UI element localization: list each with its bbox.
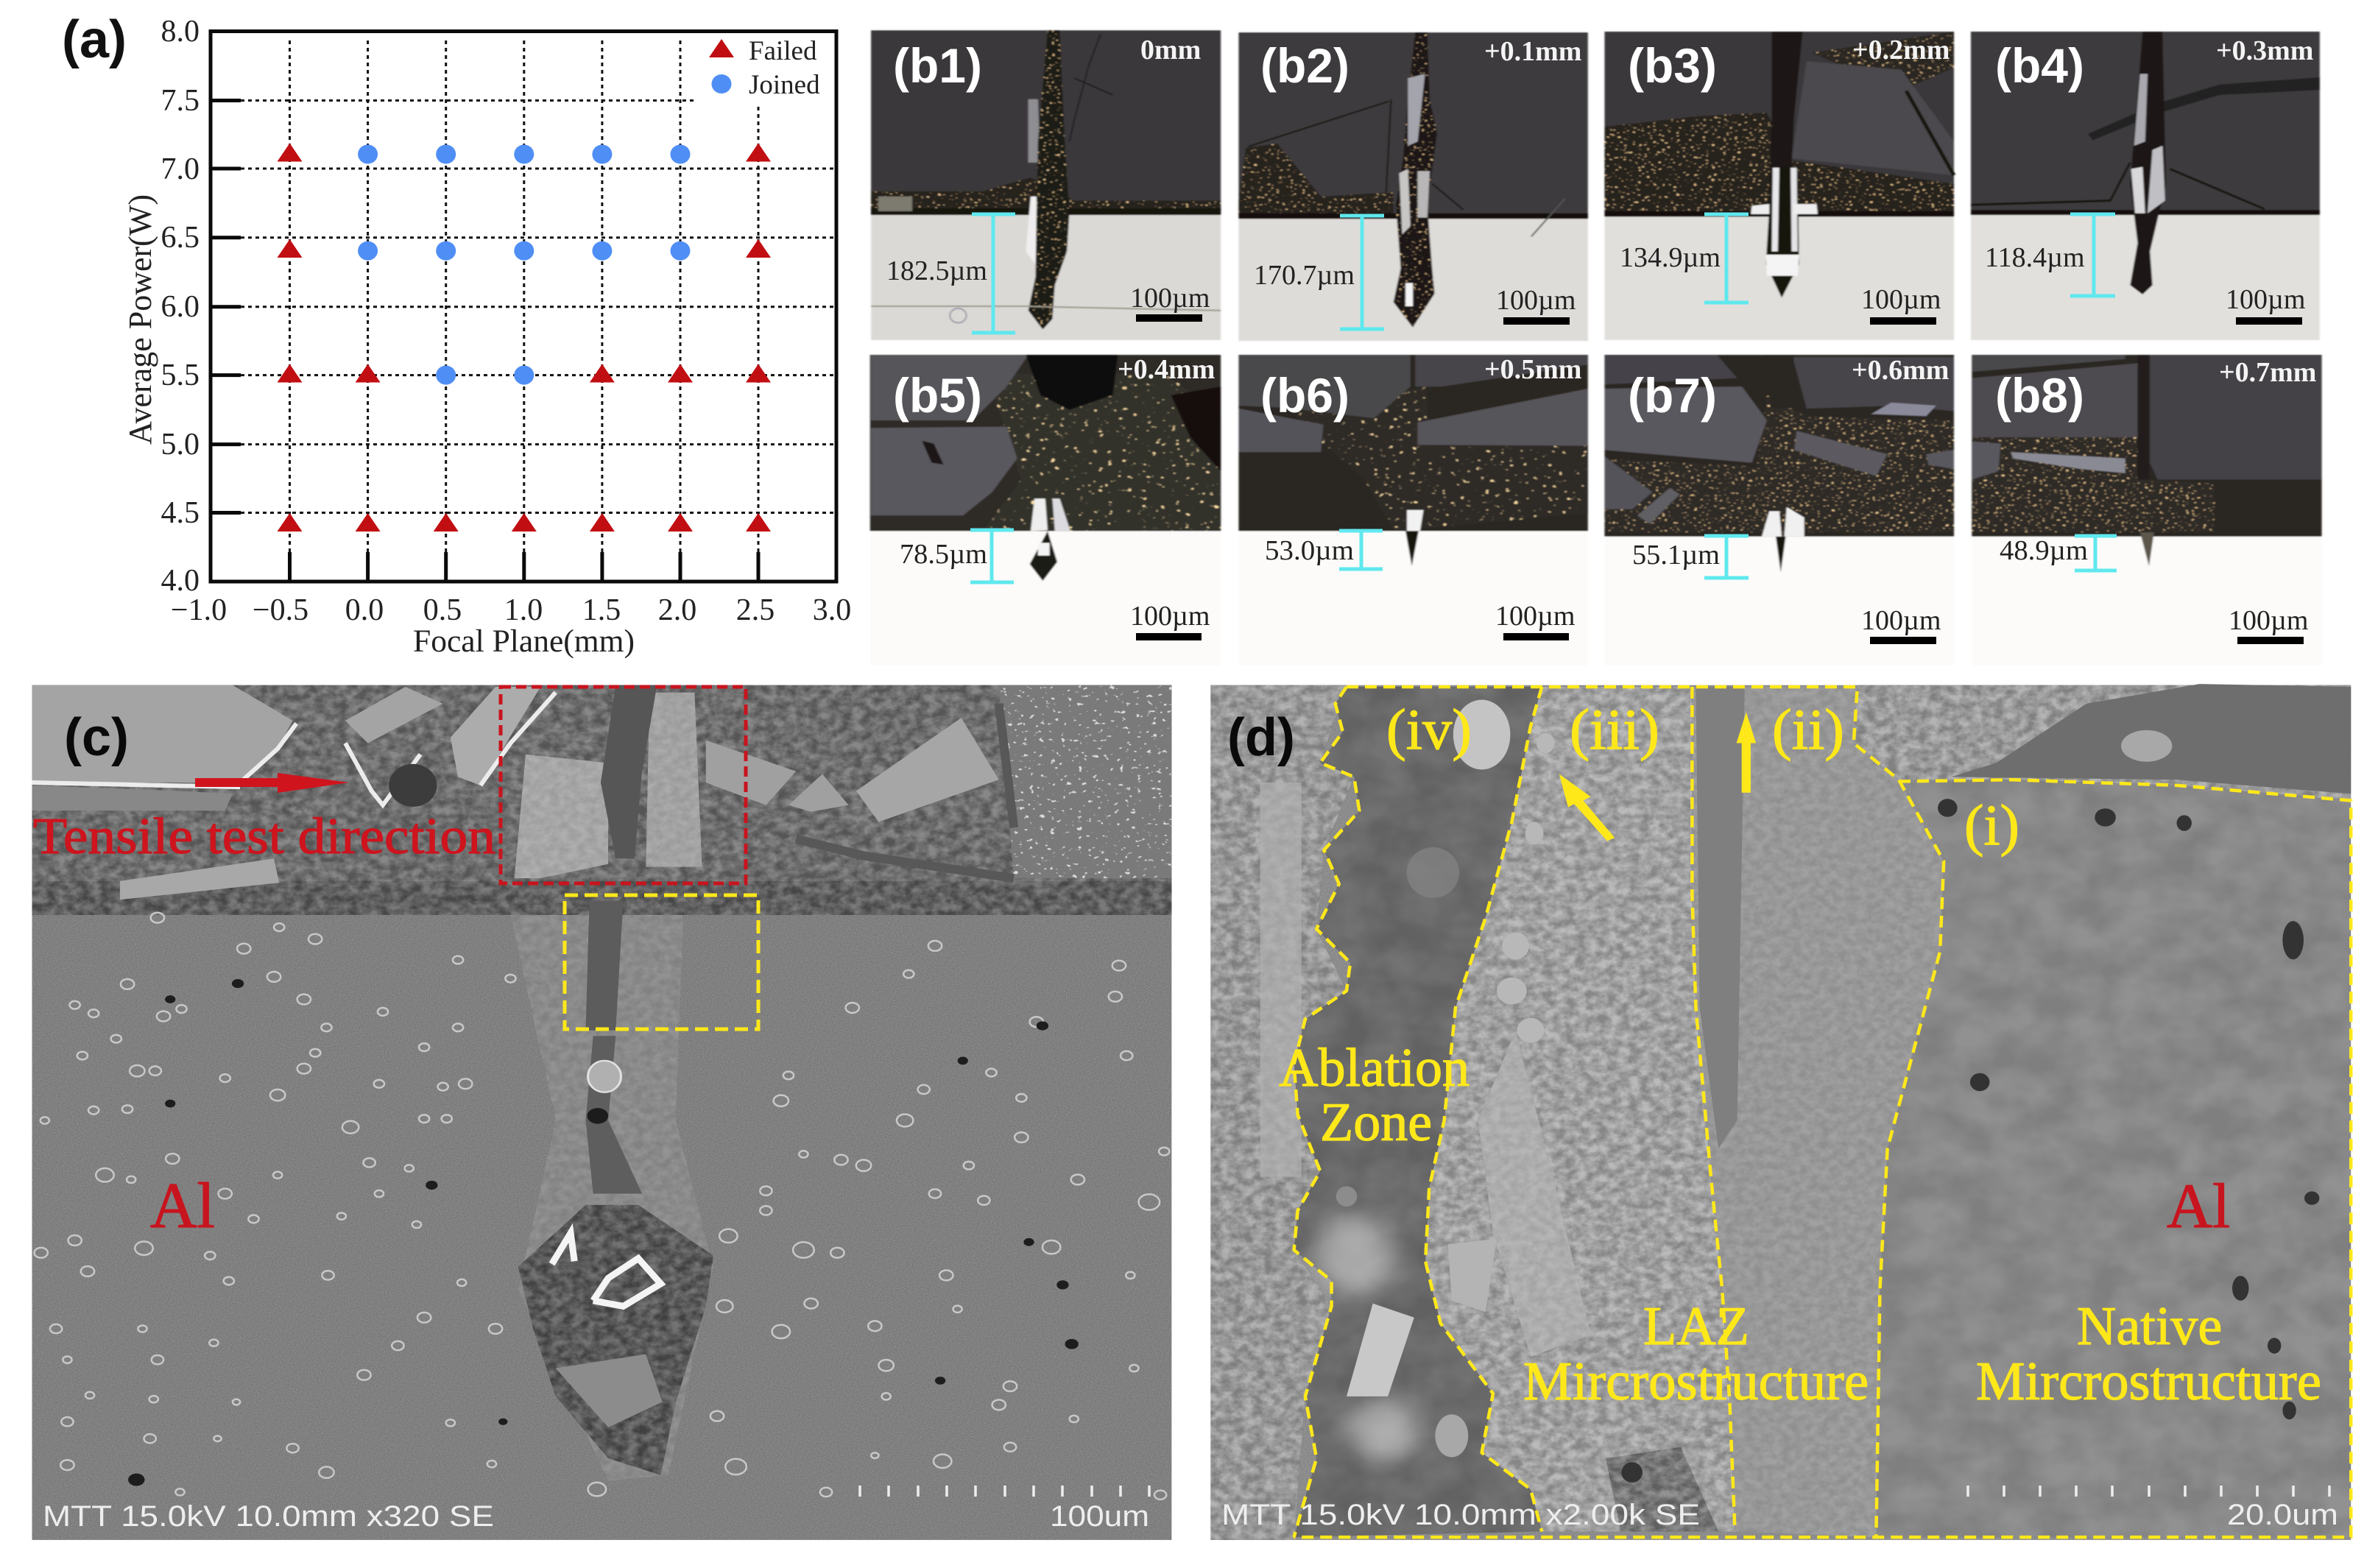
b1 image xyxy=(871,30,1221,340)
legend: Failed xyxy=(749,36,817,66)
depth values: 53.0µm xyxy=(1265,535,1354,566)
Al label c: Al xyxy=(150,1170,215,1242)
depth values: 48.9µm xyxy=(2000,535,2088,566)
panel: (a) process window chart xyxy=(62,10,851,659)
scale bar labels xyxy=(1130,283,2308,636)
x tick labels: 2.5 xyxy=(736,593,775,627)
left outer region xyxy=(1210,685,1354,1540)
x tick labels: 1.5 xyxy=(582,593,621,627)
depth values xyxy=(886,242,2088,571)
zone labels: (iii) xyxy=(1570,697,1659,761)
micrographs b3 b4 b7 b8 drawing xyxy=(1604,32,2322,665)
depth values: 134.9µm xyxy=(1620,242,1721,273)
scale bar labels: 100µm xyxy=(1130,283,1210,314)
cyan depth brackets xyxy=(970,214,2117,582)
label (d): (d) xyxy=(1227,708,1295,767)
SEM image d xyxy=(1210,684,2351,1540)
focal offset labels: +0.3mm xyxy=(2216,35,2313,66)
upper fractured zone xyxy=(32,685,1171,915)
b5 image xyxy=(870,355,1221,665)
micrographs b1 b2 b5 b6 drawing xyxy=(870,30,1588,665)
labels b1-b8: (b4) xyxy=(1995,38,2084,93)
y tick labels: 4.5 xyxy=(160,496,200,530)
zone labels: (iv) xyxy=(1386,697,1472,761)
data points: joined xyxy=(358,144,691,385)
dashed zone boundaries xyxy=(1294,687,2351,1537)
scale ticks d xyxy=(1968,1486,2329,1497)
native microstructure label: Native xyxy=(2077,1296,2222,1357)
yellow arrow: vertical xyxy=(1737,712,1756,793)
legend: Joined xyxy=(749,70,820,100)
native microstructure label xyxy=(1976,1296,2321,1412)
pores xyxy=(1621,799,2319,1483)
y axis title: Average Power(W) xyxy=(122,194,158,445)
y tick labels: 8.0 xyxy=(160,15,200,49)
b4 image xyxy=(1971,32,2320,340)
x axis title: Focal Plane(mm) xyxy=(413,624,635,659)
scale bars xyxy=(1136,314,2304,644)
LAZ microstructure label xyxy=(1523,1296,1869,1412)
SEM caption c: MTT 15.0kV 10.0mm x320 SE xyxy=(43,1500,494,1533)
ablation zone label xyxy=(1279,1038,1470,1153)
ablation zone label: Ablation xyxy=(1279,1038,1470,1098)
b8 image xyxy=(1972,355,2322,665)
x tick labels: 1.0 xyxy=(504,593,543,627)
y tick labels: 4.0 xyxy=(160,564,200,598)
labels b1-b8: (b5) xyxy=(893,368,982,423)
scale label d: 20.0um xyxy=(2227,1499,2338,1531)
x tick labels xyxy=(171,593,851,627)
labels b1-b8: (b6) xyxy=(1260,368,1349,423)
data points: failed xyxy=(277,143,771,532)
plot frame and ticks xyxy=(211,31,836,582)
scale ticks c xyxy=(860,1486,1149,1497)
LAZ microstructure label: LAZ xyxy=(1643,1296,1749,1357)
focal offset labels: +0.1mm xyxy=(1484,36,1581,67)
zone labels xyxy=(1386,697,2019,857)
zone iii xyxy=(1425,687,1735,1531)
y tick labels: 5.5 xyxy=(160,359,200,392)
scale bar labels: 100µm xyxy=(1496,285,1576,316)
label (c): (c) xyxy=(64,708,129,767)
tensile test caption: Tensile test direction xyxy=(33,808,495,865)
top-right region xyxy=(1854,684,2351,800)
labels b1-b8: (b3) xyxy=(1628,38,1717,93)
yellow arrow: diagonal xyxy=(1559,774,1615,841)
SEM image c xyxy=(32,685,1171,1540)
zone i Al xyxy=(1876,780,2351,1537)
zone labels: (ii) xyxy=(1772,697,1844,761)
labels b1-b8: (b1) xyxy=(893,38,982,93)
scale bar labels: 100µm xyxy=(2226,284,2305,315)
y tick labels: 6.5 xyxy=(160,221,200,255)
yellow dashed box xyxy=(565,895,758,1029)
x tick labels: −1.0 xyxy=(171,593,227,627)
weld root blob xyxy=(518,1205,713,1475)
y tick labels: 6.0 xyxy=(160,290,200,324)
x tick labels: 3.0 xyxy=(813,593,851,627)
y tick labels: 7.0 xyxy=(160,152,200,186)
labels b1-b8 xyxy=(893,38,2084,423)
depth values: 78.5µm xyxy=(900,539,987,570)
focal offset labels: +0.7mm xyxy=(2219,357,2316,388)
labels b1-b8: (b8) xyxy=(1995,368,2084,423)
legend xyxy=(696,35,832,103)
y tick labels: 5.0 xyxy=(160,428,200,462)
scale bar labels: 100µm xyxy=(1130,601,1210,632)
red dashed box xyxy=(501,687,746,883)
native microstructure label: Mircrostructure xyxy=(1976,1352,2321,1412)
label (a): (a) xyxy=(62,10,127,69)
x tick labels: 2.0 xyxy=(658,593,696,627)
panel: (d) SEM zones detail xyxy=(1210,684,2351,1540)
labels b1-b8: (b2) xyxy=(1260,38,1349,93)
panel: (c) SEM overview xyxy=(32,685,1171,1540)
b3 image xyxy=(1604,32,1954,340)
x tick labels: 0.5 xyxy=(423,593,462,627)
arrow: tensile test direction xyxy=(195,773,349,793)
scale bar labels: 100µm xyxy=(1495,601,1575,632)
depth values: 170.7µm xyxy=(1254,260,1355,291)
LAZ microstructure label: Mircrostructure xyxy=(1523,1352,1869,1412)
y tick labels xyxy=(160,15,200,598)
labels b1-b8: (b7) xyxy=(1628,368,1717,423)
surface pits xyxy=(35,913,1169,1500)
b2 image xyxy=(1238,32,1588,341)
x tick labels: 0.0 xyxy=(345,593,384,627)
depth values: 55.1µm xyxy=(1632,540,1720,571)
focal offset labels: +0.2mm xyxy=(1852,35,1950,66)
scale bar labels: 100µm xyxy=(1861,284,1941,315)
focal offset labels: +0.5mm xyxy=(1484,354,1581,385)
zone labels: (i) xyxy=(1964,793,2019,857)
SEM caption d: MTT 15.0kV 10.0mm x2.00k SE xyxy=(1221,1499,1700,1531)
grid lines xyxy=(241,37,836,552)
focal offset labels: +0.6mm xyxy=(1852,355,1949,386)
zone ii xyxy=(1692,687,1944,1537)
panel: (b1)-(b8) micrographs xyxy=(870,30,2322,665)
focal offset labels: +0.4mm xyxy=(1118,354,1215,385)
Al label d: Al xyxy=(2167,1170,2230,1241)
focal offset labels: 0mm xyxy=(1140,35,1201,66)
zone iv ablation xyxy=(1294,687,1542,1537)
scale bar labels: 100µm xyxy=(2229,605,2308,636)
scale label c: 100um xyxy=(1050,1500,1149,1533)
b6 image xyxy=(1238,355,1588,665)
depth values: 182.5µm xyxy=(886,255,987,286)
y tick labels: 7.5 xyxy=(160,84,200,118)
dark pits xyxy=(128,979,1079,1486)
depth values: 118.4µm xyxy=(1985,242,2085,273)
scale bar labels: 100µm xyxy=(1861,605,1941,636)
focal offset labels xyxy=(1118,35,2316,388)
b7 image xyxy=(1604,355,1954,665)
ablation zone label: Zone xyxy=(1320,1092,1432,1153)
central weld channel xyxy=(510,685,713,1481)
x tick labels: −0.5 xyxy=(253,593,308,627)
